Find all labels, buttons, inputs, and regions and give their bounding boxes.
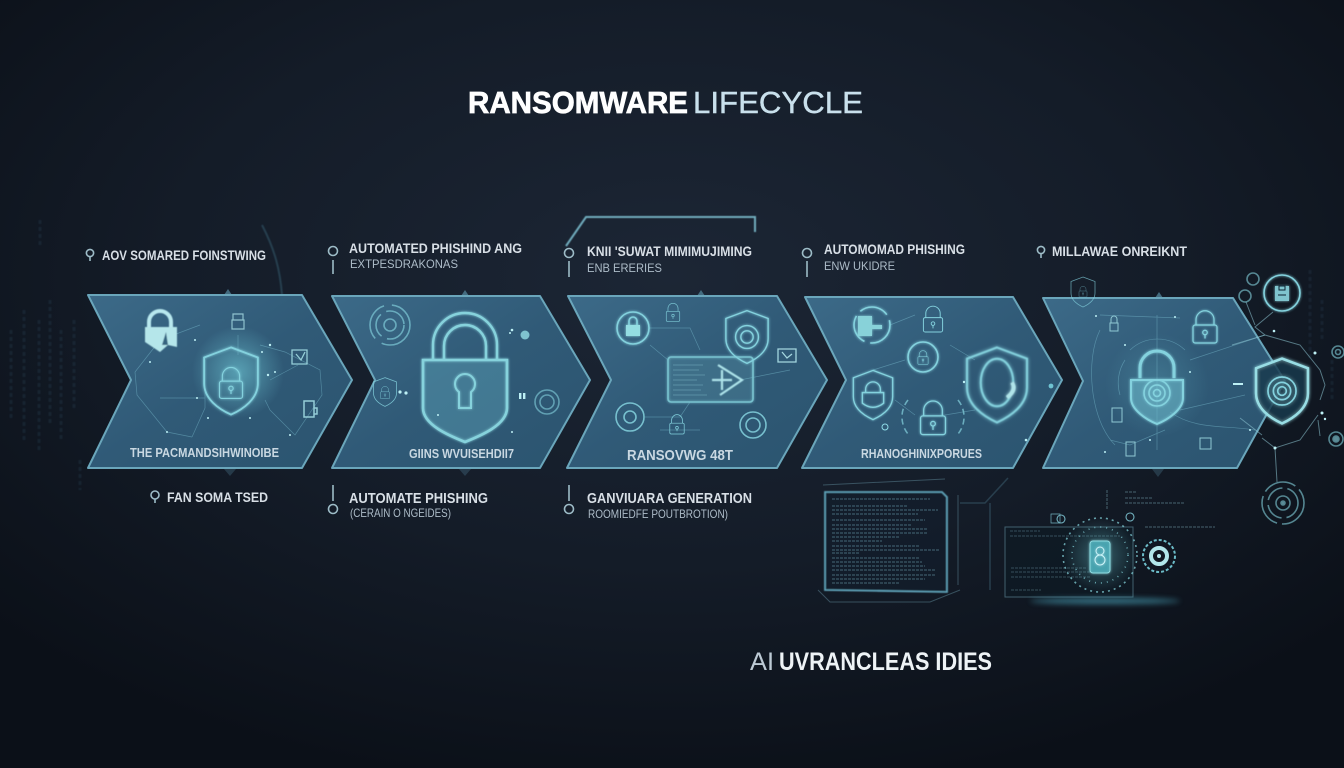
step 3 caption: RANSOVWG 48T	[627, 447, 733, 464]
step 1 network	[135, 325, 322, 437]
right network	[1232, 302, 1325, 482]
step 1 specks	[149, 339, 291, 436]
top label 5: MILLAWAE ONREIKNT	[1052, 244, 1188, 259]
step 3 network	[645, 328, 790, 430]
bottom label 2: AUTOMATE PHISHING	[349, 491, 488, 507]
globe	[1062, 517, 1138, 593]
panel: log window	[806, 479, 960, 602]
top label 4	[802, 242, 965, 277]
icon: solid padlock	[145, 311, 177, 352]
bottom label 3: ROOMIEDFE POUTBROTION)	[588, 507, 728, 521]
title: RANSOMWARE	[468, 85, 688, 120]
top label 4: AUTOMOMAD PHISHING	[824, 242, 965, 257]
connector to bottom panels	[960, 478, 1008, 590]
icon: small lock	[666, 303, 680, 321]
panel: step 1 chevron	[88, 295, 352, 468]
footer heading: AI	[750, 648, 774, 676]
panel: step 5 chevron	[1043, 277, 1285, 468]
step 2 specks	[398, 329, 525, 433]
step 4 small dots	[882, 381, 1053, 441]
top label 4: ENW UKIDRE	[824, 259, 895, 273]
step 1 glow	[192, 326, 284, 418]
panel: step 4 chevron	[802, 297, 1062, 468]
icon: small picture	[778, 349, 796, 362]
top label 1: AOV SOMARED FOINSTWING	[102, 248, 266, 263]
top label 2: EXTPESDRAKONAS	[350, 257, 458, 271]
icon: small shield lock	[373, 378, 397, 406]
icon: gear ring	[1143, 540, 1175, 572]
small node icons	[1239, 273, 1344, 446]
icon: small lock	[232, 314, 244, 329]
icon: small shield above edge	[1071, 277, 1095, 307]
icon: central lock	[1131, 351, 1183, 424]
icon: floppy circle	[1264, 275, 1300, 311]
title	[468, 85, 863, 120]
icon: screen	[668, 357, 753, 402]
icon: bottom lock	[921, 401, 945, 435]
small nodes	[1051, 513, 1134, 523]
icon: circle lock	[908, 342, 938, 372]
bottom label 2	[328, 485, 488, 520]
panel: step 3 chevron	[567, 296, 827, 468]
icon: circle lock	[617, 312, 649, 344]
matrix columns right	[1310, 270, 1332, 400]
icon: bottom ring	[1262, 482, 1304, 524]
icon: small document	[304, 401, 317, 417]
screen lines	[673, 365, 707, 395]
small icons in step 5	[1110, 316, 1211, 456]
console top annotations	[1107, 490, 1215, 527]
icon: bottom lock	[670, 415, 684, 434]
connector curve above step 1	[262, 225, 282, 295]
console lines	[1010, 531, 1120, 590]
step 5 radial network	[1092, 315, 1265, 450]
bottom label 3	[564, 485, 752, 521]
icon: right shield	[1256, 359, 1308, 423]
footer heading: UVRANCLEAS IDIES	[779, 648, 992, 676]
top label 3: ENB ERERIES	[587, 261, 662, 275]
step 4 network	[873, 315, 975, 415]
icon: arrow plus	[712, 365, 742, 395]
top label 2	[328, 241, 522, 274]
console glow	[1030, 598, 1180, 604]
icon: circle bottom left	[616, 403, 644, 431]
icon: top lock	[923, 306, 943, 332]
top label 3: KNII 'SUWAT MIMIMUJIMING	[587, 244, 752, 259]
log text lines	[832, 499, 940, 583]
bracket above step 3	[566, 217, 755, 246]
top glow line	[208, 213, 248, 215]
matrix columns left	[11, 220, 80, 490]
bottom label 1: FAN SOMA TSED	[167, 490, 268, 505]
icon: left shield	[853, 370, 893, 420]
icon: circle bottom right	[740, 412, 766, 438]
top label 3	[564, 244, 752, 277]
panel: lock console	[1005, 490, 1215, 604]
icon: small badge	[520, 330, 530, 340]
icon: large padlock	[423, 313, 507, 442]
icon: circle card	[854, 307, 890, 343]
icon: small image frame	[292, 350, 307, 364]
top label 2: AUTOMATED PHISHIND ANG	[349, 241, 522, 256]
panel: step 2 chevron	[332, 296, 590, 468]
step 5 glow	[1105, 333, 1209, 437]
step 5 specks	[1095, 315, 1251, 453]
step 1 caption: THE PACMANDSIHWINOIBE	[130, 445, 279, 460]
bottom lock arc	[902, 400, 964, 434]
icon: globe lock	[1090, 541, 1110, 573]
right network dots	[1273, 330, 1326, 450]
icon: small badge ring	[535, 390, 559, 414]
icon: top lock	[1193, 311, 1217, 343]
icon: shield with lock	[204, 347, 258, 415]
step 4 caption: RHANOGHINIXPORUES	[861, 446, 982, 461]
icon: big shield	[967, 348, 1027, 422]
title: LIFECYCLE	[693, 85, 863, 120]
step 2 caption: GIINS WVUISEHDII7	[409, 446, 514, 461]
icon: ring	[370, 305, 410, 345]
marker triangles	[224, 289, 1164, 477]
bottom label 3: GANVIUARA GENERATION	[587, 491, 752, 507]
bottom label 2: (CERAIN O NGEIDES)	[350, 506, 451, 520]
icon: shield	[726, 311, 768, 363]
